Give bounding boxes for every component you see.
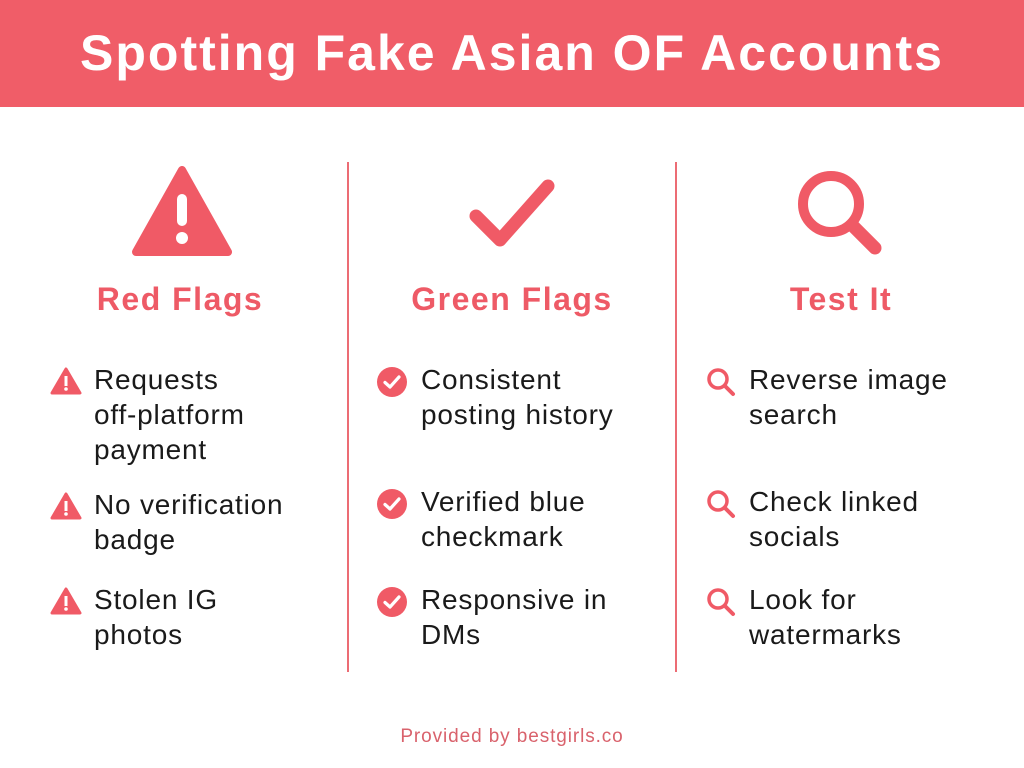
item 1 xyxy=(50,364,245,465)
item 2: socials xyxy=(749,521,840,552)
panel: red flags xyxy=(50,166,283,650)
heading: Test It xyxy=(790,281,892,317)
heading: Green Flags xyxy=(411,281,613,317)
item 3 xyxy=(707,584,902,650)
item 3: photos xyxy=(94,619,183,650)
item 3 xyxy=(50,584,218,650)
header: Spotting Fake Asian OF Accounts xyxy=(80,25,944,81)
item 2 xyxy=(50,489,283,555)
item 1 xyxy=(707,364,948,430)
icon: magnifier xyxy=(798,171,882,254)
item 1: search xyxy=(749,399,838,430)
item 1: payment xyxy=(94,434,207,465)
icon: warning xyxy=(132,166,232,256)
item 3: DMs xyxy=(421,619,481,650)
item 2 xyxy=(707,486,919,552)
item 1: off-platform xyxy=(94,399,245,430)
header xyxy=(0,0,1024,107)
item 2: Check linked xyxy=(749,486,919,517)
item 3 xyxy=(377,584,607,650)
item 2: No verification xyxy=(94,489,283,520)
item 1: Consistent xyxy=(421,364,561,395)
panel: green flags xyxy=(377,180,614,650)
panel: test it xyxy=(707,171,948,650)
heading: Red Flags xyxy=(97,281,263,317)
item 2 xyxy=(377,486,586,552)
item 1: Reverse image xyxy=(749,364,948,395)
item 1: Requests xyxy=(94,364,219,395)
footer: Provided by bestgirls.co xyxy=(400,726,624,747)
item 2: Verified blue xyxy=(421,486,586,517)
item 3: watermarks xyxy=(749,619,902,650)
item 3: Responsive in xyxy=(421,584,607,615)
item 1 xyxy=(377,364,614,430)
item 3: Look for xyxy=(749,584,857,615)
item 1: posting history xyxy=(421,399,614,430)
item 2: checkmark xyxy=(421,521,564,552)
item 2: badge xyxy=(94,524,176,555)
item 3: Stolen IG xyxy=(94,584,218,615)
icon: checkmark xyxy=(470,180,554,246)
